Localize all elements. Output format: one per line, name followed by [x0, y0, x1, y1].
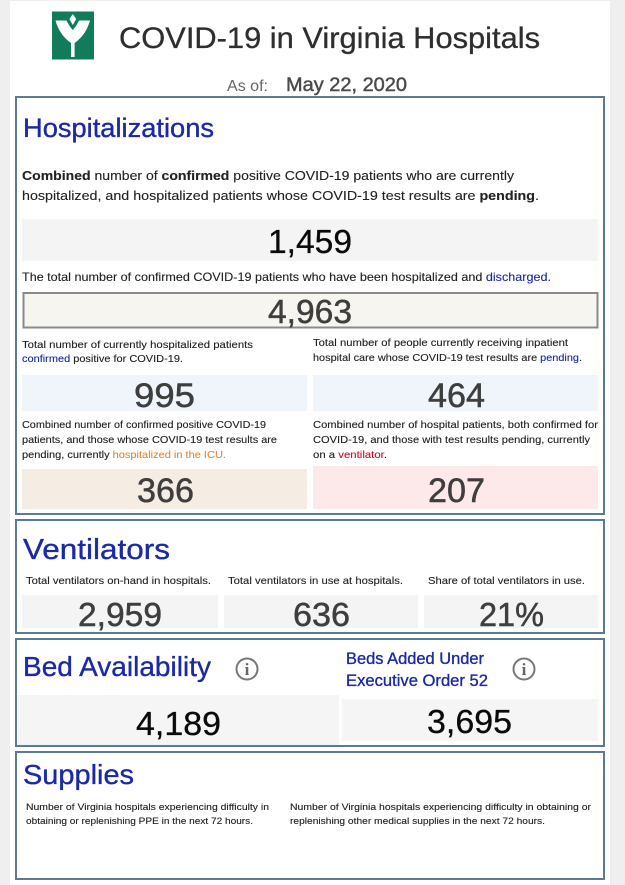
description: combined hospitalized: hospitalized, and hospitalized patients whose COVID-19 test results are pending .	[22, 188, 539, 203]
description: confirmed: Total number of currently hospitalized patients	[22, 339, 253, 351]
description: confirmed: confirmed positive for COVID-19.	[22, 353, 183, 365]
panel: bed availability	[16, 639, 604, 746]
stat: 2,959: 2,959	[78, 596, 162, 633]
heading: bed availability: Bed Availability	[23, 651, 211, 682]
stat: 4,963 discharged: 4,963	[268, 293, 352, 330]
icon: info	[236, 658, 258, 680]
stat: 464 pending	[313, 375, 598, 415]
description: ICU: pending, currently hospitalized in the ICU.	[22, 449, 226, 461]
description: confirmed	[22, 339, 253, 365]
description: ICU	[22, 419, 277, 461]
as-of date: As of:	[227, 78, 268, 95]
description: combined hospitalized: Combined number of confirmed positive COVID-19 patients who are currently	[22, 168, 515, 183]
stat: 636: 636	[293, 596, 350, 633]
description: ventilator	[313, 419, 599, 461]
description: discharged: The total number of confirmed COVID-19 patients who have been hospitalized and discharged.	[22, 270, 551, 284]
icon: info	[514, 658, 534, 680]
as-of date	[227, 74, 407, 96]
stat: 995 confirmed	[22, 375, 307, 415]
stat: 1,459 hospitalized	[22, 219, 598, 261]
description: pending: hospital care whose COVID-19 test results are pending.	[313, 352, 582, 364]
heading: beds added: Executive Order 52	[346, 672, 488, 690]
stat: 3,695: 3,695	[427, 703, 512, 740]
stat: 3,695	[342, 699, 598, 741]
stat: 1,459 hospitalized: 1,459	[268, 223, 352, 260]
description: ICU: patients, and those whose COVID-19 test results are	[22, 434, 277, 446]
stat: 207 ventilator	[313, 466, 598, 510]
heading: ventilators: Ventilators	[23, 534, 170, 566]
icon: info: i	[522, 660, 527, 679]
panel: ventilators	[16, 520, 604, 633]
description: ventilator: on a ventilator .	[313, 449, 387, 461]
description: PPE: Number of Virginia hospitals experiencing difficulty in	[26, 802, 269, 813]
icon: info: i	[245, 660, 250, 679]
heading: beds added	[346, 650, 488, 690]
stat: 4,189: 4,189	[136, 705, 221, 742]
panel: hospitalizations	[16, 97, 604, 514]
as-of date: May 22, 2020	[286, 74, 407, 96]
description: pending: Total number of people currently receiving inpatient	[313, 337, 568, 349]
description: PPE	[26, 802, 269, 827]
stat: 21%: 21%	[479, 596, 544, 633]
stat: 464 pending: 464	[428, 377, 485, 415]
panel: supplies	[16, 752, 604, 879]
stat: 207 ventilator: 207	[428, 472, 485, 510]
description: pending	[313, 337, 582, 364]
stat: 636	[224, 595, 418, 633]
title: COVID-19 in Virginia Hospitals	[119, 22, 540, 55]
label: in use: Total ventilators in use at hospitals.	[228, 575, 403, 587]
stat: 366 ICU: 366	[137, 472, 194, 510]
description: PPE: obtaining or replenishing PPE in the next 72 hours.	[26, 816, 253, 827]
stat: 995 confirmed: 995	[134, 377, 195, 415]
description: other supplies: Number of Virginia hospitals experiencing difficulty in obtaining or	[290, 802, 591, 813]
description: ICU: Combined number of confirmed positive COVID-19	[22, 419, 266, 431]
icon: hospital association logo	[52, 12, 94, 60]
heading: beds added: Beds Added Under	[346, 650, 484, 668]
label: on-hand: Total ventilators on-hand in hospitals.	[26, 575, 211, 587]
description: other supplies	[290, 802, 591, 827]
stat: 4,963 discharged	[24, 293, 598, 330]
description: combined hospitalized	[22, 168, 539, 203]
stat: 21%	[424, 595, 598, 633]
label: share: Share of total ventilators in use.	[428, 575, 585, 587]
header	[52, 12, 540, 96]
heading: supplies: Supplies	[23, 759, 134, 790]
description: other supplies: replenishing other medical supplies in the next 72 hours.	[290, 816, 545, 827]
description: ventilator: Combined number of hospital patients, both confirmed for	[313, 419, 599, 431]
heading: hospitalizations: Hospitalizations	[23, 113, 214, 143]
stat: 366 ICU	[22, 469, 307, 510]
stat: 2,959	[22, 595, 218, 633]
stat: 4,189	[18, 695, 339, 745]
description: ventilator: COVID-19, and those with test results pending, currently	[313, 434, 591, 446]
